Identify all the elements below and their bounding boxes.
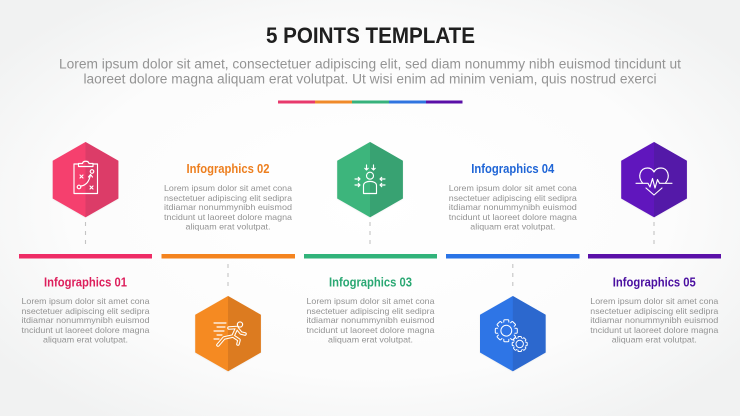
subtitle text: Lorem ipsum dolor sit amet, consectetuer adipiscing elit, sed diam nonummy nibh euismod tincidunt ut <box>59 56 681 72</box>
hexagon 4 with gears icon <box>480 296 546 371</box>
text block 5: aliquam erat volutpat. <box>612 336 697 344</box>
icon: clipboard <box>74 161 98 194</box>
text block 4: aliquam erat volutpat. <box>470 222 555 232</box>
text block 5: nsectetuer adipiscing elit sedipra <box>590 307 719 316</box>
text block 4 <box>449 162 577 232</box>
text block 3 <box>306 276 435 344</box>
text block 1 <box>22 276 150 344</box>
heading 01: Infographics 01 <box>44 276 127 290</box>
heading 03: Infographics 03 <box>329 276 412 290</box>
icon: gears <box>495 320 527 352</box>
text block 1: aliquam erat volutpat. <box>43 336 128 344</box>
text block 3: nsectetuer adipiscing elit sedipra <box>306 307 435 316</box>
timeline bar 1 <box>19 254 152 258</box>
hexagon 3 with person icon <box>337 142 403 217</box>
hexagon 5 with heart icon <box>621 142 687 217</box>
hexagon 1 with clipboard icon <box>53 142 118 217</box>
text block 5: itdiamar nonummynibh euismod <box>590 316 719 325</box>
text block 1: nsectetuer adipiscing elit sedipra <box>22 307 150 316</box>
subtitle text: laoreet dolore magna aliquam erat volutpat. Ut wisi enim ad minim veniam, quis nostrud exerci <box>84 72 656 86</box>
rainbow divider <box>278 100 462 104</box>
text block 2: nsectetuer adipiscing elit sedipra <box>164 194 292 203</box>
text block 5: tncidunt ut laoreet dolore magna <box>590 326 719 335</box>
text block 4: Lorem ipsum dolor sit amet cona <box>449 184 577 193</box>
text block 2 <box>164 162 292 232</box>
text block 1: tncidunt ut laoreet dolore magna <box>22 326 150 335</box>
icon: running figure <box>214 322 245 345</box>
text block 5 <box>590 276 719 344</box>
heading 05: Infographics 05 <box>613 276 696 290</box>
heading 02: Infographics 02 <box>186 162 270 176</box>
text block 4: itdiamar nonummynibh euismod <box>449 203 577 212</box>
timeline bar 5 <box>588 254 721 258</box>
text block 1: itdiamar nonummynibh euismod <box>22 316 150 325</box>
text block 2: aliquam erat volutpat. <box>186 222 270 232</box>
hexagon 2 with runner icon <box>195 296 261 371</box>
title: 5 POINTS TEMPLATE <box>266 23 475 48</box>
text block 2: tncidunt ut laoreet dolore magna <box>164 213 292 222</box>
text block 5: Lorem ipsum dolor sit amet cona <box>590 297 719 306</box>
text block 2: itdiamar nonummynibh euismod <box>164 203 292 212</box>
text block 2: Lorem ipsum dolor sit amet cona <box>164 184 292 193</box>
heading 04: Infographics 04 <box>471 162 554 176</box>
timeline bar 3 <box>304 254 437 258</box>
icon: heart with pulse <box>636 168 672 195</box>
text block 3: aliquam erat volutpat. <box>328 336 413 344</box>
text block 3: tncidunt ut laoreet dolore magna <box>306 326 435 335</box>
text block 3: Lorem ipsum dolor sit amet cona <box>306 297 435 306</box>
text block 1: Lorem ipsum dolor sit amet cona <box>22 297 150 306</box>
text block 3: itdiamar nonummynibh euismod <box>306 316 435 325</box>
text block 4: nsectetuer adipiscing elit sedipra <box>449 194 577 203</box>
icon: person with arrows <box>355 165 385 194</box>
timeline bar 2 <box>162 254 295 258</box>
timeline bar 4 <box>446 254 580 258</box>
text block 4: tncidunt ut laoreet dolore magna <box>449 213 577 222</box>
subtitle text <box>59 56 681 86</box>
